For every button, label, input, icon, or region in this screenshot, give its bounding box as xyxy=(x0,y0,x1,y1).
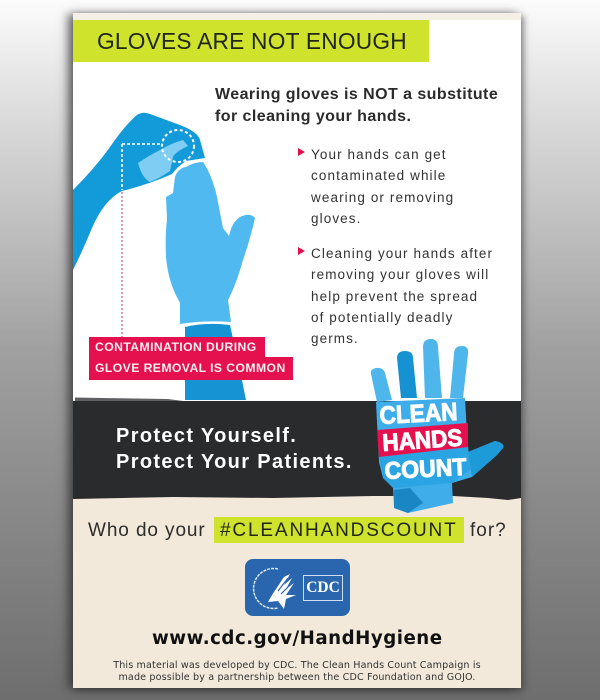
icon: palm xyxy=(376,398,503,513)
bullet 2 xyxy=(298,246,493,346)
bullet text: Cleaning your hands after xyxy=(311,246,493,261)
question end: for? xyxy=(470,520,507,541)
glove illustration xyxy=(73,112,255,400)
bullet text: Your hands can get xyxy=(311,147,447,162)
bullet marker xyxy=(298,247,305,255)
callout text: CONTAMINATION DURING xyxy=(95,340,257,354)
callout text xyxy=(95,340,286,375)
cdc wordmark: CDC xyxy=(306,579,340,596)
intro statement: Wearing gloves is NOT a substitute xyxy=(215,86,498,103)
hashtag: #CLEANHANDSCOUNT xyxy=(220,520,458,541)
poster panel xyxy=(73,13,521,688)
logo text count: COUNT xyxy=(384,454,468,485)
website url: www.cdc.gov/HandHygiene xyxy=(152,628,443,649)
footer note: This material was developed by CDC. The Clean Hands Count Campaign is xyxy=(113,660,481,671)
bullet text: of potentially deadly xyxy=(311,310,453,325)
logo text clean: CLEAN xyxy=(379,398,458,430)
icon: fingers xyxy=(371,339,468,402)
cdc logo xyxy=(245,559,350,616)
bullet text: contaminated while xyxy=(311,168,446,183)
logo band red xyxy=(377,423,468,457)
title banner xyxy=(73,20,429,62)
bullet text xyxy=(311,246,493,346)
contamination callout xyxy=(89,337,293,380)
footer note xyxy=(113,660,481,683)
clean hands count logo xyxy=(370,339,504,513)
cream top edge xyxy=(73,13,521,20)
bullet text: help prevent the spread xyxy=(311,289,478,304)
callout text: GLOVE REMOVAL IS COMMON xyxy=(95,361,286,375)
callout background line 2 xyxy=(89,357,293,380)
bullet text: wearing or removing xyxy=(311,190,454,205)
question line: Who do your xyxy=(88,520,206,541)
protect slogan: Protect Yourself. xyxy=(116,425,297,447)
title: GLOVES ARE NOT ENOUGH xyxy=(97,28,407,54)
bullet text xyxy=(311,147,454,226)
icon: gloved hand pinching xyxy=(73,113,205,270)
protect slogan xyxy=(116,425,353,473)
intro statement: for cleaning your hands. xyxy=(215,108,411,125)
hashtag highlight xyxy=(214,517,464,543)
bullet 1 xyxy=(298,147,454,226)
cdc wordmark xyxy=(303,575,343,601)
icon: glove being removed xyxy=(166,162,255,400)
black brush band xyxy=(73,398,521,500)
bullet text: removing your gloves will xyxy=(311,267,489,282)
icon: hhs eagle xyxy=(252,568,296,610)
footer note: made possible by a partnership between the CDC Foundation and GOJO. xyxy=(118,672,476,683)
bullet marker xyxy=(298,148,305,156)
callout background line 1 xyxy=(89,337,265,359)
cream footer panel xyxy=(73,495,521,688)
bullet text: gloves. xyxy=(311,211,361,226)
intro statement xyxy=(215,86,498,125)
bullet text: germs. xyxy=(311,331,359,346)
dashed callout line xyxy=(122,130,194,337)
logo text hands: HANDS xyxy=(382,424,463,457)
protect slogan: Protect Your Patients. xyxy=(116,451,353,473)
